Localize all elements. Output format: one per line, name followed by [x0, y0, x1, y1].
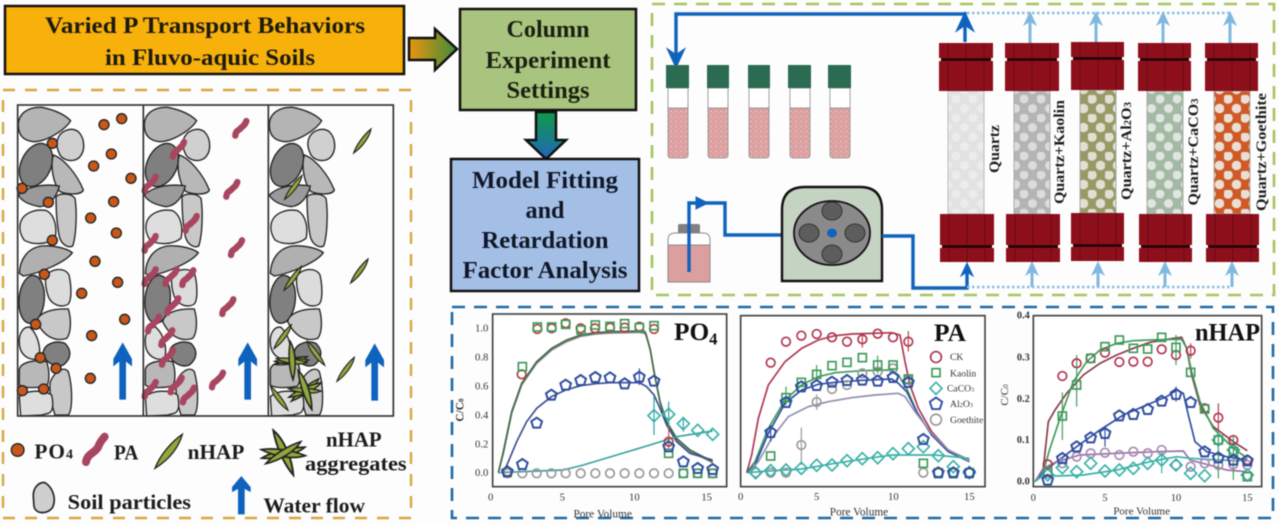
legend item: nHAP aggregates	[259, 428, 407, 476]
chart legend: Kaolin	[950, 368, 976, 379]
fitted curves	[747, 333, 969, 473]
axis labels: 0.6	[475, 382, 489, 393]
column: Quartz+CaCO3: Quartz+CaCO3	[1186, 98, 1202, 206]
legend item: nHAP: nHAP	[188, 440, 244, 464]
light blue flow arrows	[1023, 11, 1239, 287]
data: Al2O3	[765, 372, 975, 477]
box: Model Fitting and Retardation Factor Analysis: Retardation	[482, 228, 608, 254]
chart legend: CaCO3	[947, 383, 974, 394]
axis labels: 0	[1031, 493, 1036, 504]
column: PA transport	[139, 107, 257, 416]
legend item: nHAP aggregates: aggregates	[305, 452, 407, 476]
axis labels: 15	[964, 492, 975, 503]
legend item: soil particles: Soil particles	[68, 490, 191, 514]
axis labels: 10	[629, 492, 640, 503]
box: Model Fitting and Retardation Factor Analysis: and	[526, 198, 565, 224]
axis labels: C/C0	[999, 384, 1011, 406]
axis labels: 10	[1171, 493, 1181, 504]
peristaltic pump	[782, 187, 882, 281]
axis labels	[999, 310, 1252, 517]
column: Quartz+CaCO3	[1138, 43, 1202, 262]
axis labels	[738, 492, 975, 519]
data: CK	[503, 319, 673, 476]
data: kaolin	[518, 320, 717, 477]
title box: Varied P Transport Behaviors	[5, 6, 404, 74]
error bars	[771, 331, 908, 465]
chart: PA	[738, 316, 985, 519]
tubing: pump to column	[882, 236, 973, 288]
chart: PO4	[454, 314, 727, 520]
column: Quartz+Goethite	[1205, 43, 1270, 262]
chart: nHAP	[999, 310, 1262, 517]
legend item: nHAP	[155, 434, 244, 468]
data: CK	[1043, 345, 1252, 469]
axis labels: 0.1	[1017, 435, 1030, 446]
axis labels: 5	[814, 492, 819, 503]
dotted distribution lines	[967, 13, 1232, 287]
data: CaCO3	[648, 408, 719, 440]
column frame	[18, 105, 393, 416]
column: Quartz	[939, 43, 1003, 262]
legend item: water flow	[232, 476, 366, 517]
axis labels	[454, 324, 712, 520]
fitted curves	[1035, 337, 1247, 482]
column: Quartz+Kaolin: Quartz+Kaolin	[1052, 99, 1068, 204]
axis labels: Pore Volume	[1113, 505, 1170, 517]
axis labels: 0.8	[475, 353, 488, 364]
error bars	[639, 368, 683, 448]
diagram: three soil columns	[13, 105, 393, 416]
legend item: soil particles	[33, 483, 191, 514]
title box: Varied P Transport Behaviors: in Fluvo-aquic Soils	[105, 45, 315, 71]
data: kaolin	[1044, 333, 1251, 481]
tubing: outlet to vials	[670, 14, 971, 65]
arrow: title to column experiment	[409, 29, 457, 70]
data: CaCO3	[750, 441, 975, 479]
column: Quartz+Kaolin	[1005, 43, 1068, 262]
chart title: nHAP: nHAP	[1195, 319, 1260, 347]
column: Quartz: Quartz	[987, 125, 1003, 173]
chart title: PO4: PO	[674, 318, 709, 346]
box: Column Experiment Settings: Experiment	[486, 48, 611, 74]
arrow: column experiment to model fitting	[526, 112, 566, 159]
box: Model Fitting and Retardation Factor Analysis: Model Fitting	[472, 168, 618, 194]
column: Quartz+Al2O3: Quartz+Al2O3	[1119, 102, 1135, 200]
box: Model Fitting and Retardation Factor Analysis	[451, 159, 639, 291]
column: nHAP transport	[264, 107, 384, 416]
data: Al2O3	[1042, 389, 1253, 485]
collection vials	[666, 65, 851, 158]
tubing: bottle to pump	[689, 197, 782, 272]
legend item: PO4	[11, 439, 74, 463]
legend item: nHAP aggregates: nHAP	[326, 428, 382, 452]
axis labels: 0.4	[1017, 310, 1030, 321]
data: goethite	[751, 364, 974, 477]
legend	[11, 428, 407, 517]
axis labels: 0.4	[475, 411, 489, 422]
error bars	[1062, 335, 1233, 480]
axis labels: 0.0	[1017, 477, 1030, 488]
axis labels: 0.2	[475, 439, 488, 450]
data: kaolin	[767, 354, 973, 477]
chart legend: Goethite	[950, 415, 983, 426]
axis labels: 1.0	[475, 324, 488, 335]
data: goethite	[503, 469, 717, 478]
chart title: PA: PA	[934, 319, 967, 347]
axis labels: C/C0	[454, 398, 466, 422]
title box: Varied P Transport Behaviors: Varied P Transport Behaviors	[45, 13, 365, 39]
axis labels: 5	[560, 492, 565, 503]
column: PO4 transport	[13, 107, 136, 416]
chart legend: Al2O3	[950, 399, 973, 410]
box: Column Experiment Settings: Settings	[506, 78, 590, 104]
axis labels: 10	[888, 492, 899, 503]
legend item: PA	[86, 437, 139, 464]
axis labels: 0.3	[1017, 352, 1030, 363]
data: CaCO3	[1042, 434, 1253, 482]
column: Quartz+Goethite: Quartz+Goethite	[1254, 93, 1270, 211]
data: Al2O3	[502, 372, 718, 476]
panel: soil transport behaviours	[3, 90, 411, 518]
legend item: PO4: PO4	[34, 439, 74, 463]
axis labels: 0	[488, 492, 493, 503]
panel: column experiment apparatus	[652, 4, 1274, 295]
data: goethite	[1043, 446, 1252, 478]
chart title: PO4: 4	[709, 330, 718, 349]
axis labels: 15	[1242, 493, 1252, 504]
column: Quartz+Al2O3	[1071, 42, 1135, 261]
chart legend: CK	[950, 352, 963, 363]
axis labels: 15	[701, 492, 712, 503]
axis labels: 0	[738, 492, 743, 503]
axis labels: 0.0	[475, 468, 488, 479]
axis labels: 5	[1102, 493, 1108, 504]
chart legend	[930, 352, 983, 426]
box: Model Fitting and Retardation Factor Analysis: Factor Analysis	[462, 258, 628, 284]
panel: breakthrough curves	[452, 307, 1273, 520]
axis labels: Pore Volume	[830, 507, 888, 519]
box: Column Experiment Settings	[460, 9, 636, 110]
legend item: water flow: Water flow	[263, 493, 366, 517]
box: Column Experiment Settings: Column	[506, 17, 590, 43]
feed bottle	[668, 224, 710, 282]
axis labels: Pore Volume	[573, 508, 632, 520]
legend item: PA: PA	[114, 440, 139, 464]
axis labels: 0.2	[1017, 394, 1030, 405]
data: CK	[766, 329, 913, 367]
fitted curves	[498, 331, 713, 473]
